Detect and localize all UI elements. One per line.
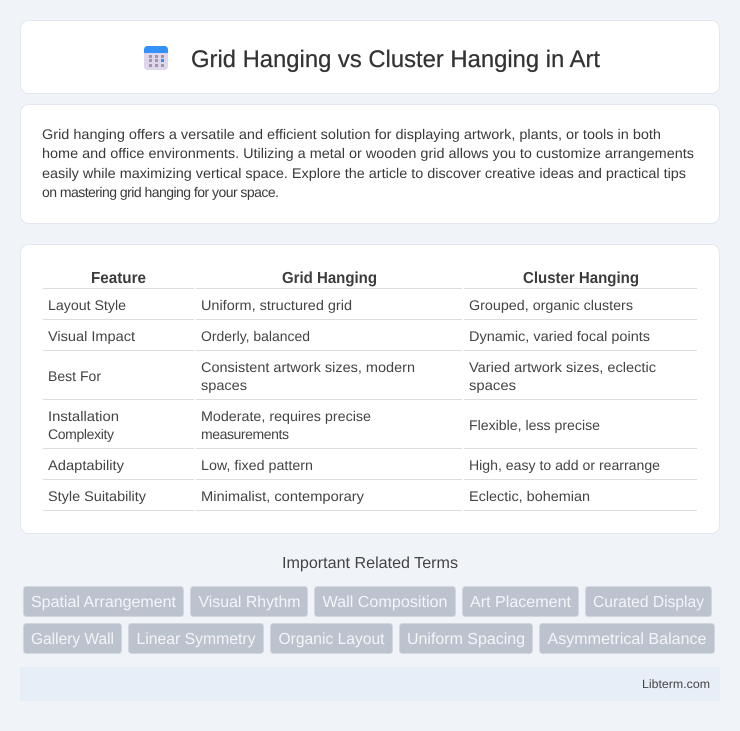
text block: description: home and office environments. Utilizing a metal or wooden grid allows you to customize arrangements bbox=[42, 145, 694, 161]
row: best for: spaces bbox=[201, 377, 247, 393]
row: visual impact: Dynamic, varied focal points bbox=[469, 328, 650, 344]
chip: Asymmetrical Balance bbox=[540, 624, 714, 654]
footer bbox=[20, 667, 720, 701]
title: Grid Hanging vs Cluster Hanging in Art bbox=[191, 46, 600, 73]
chip: Visual Rhythm bbox=[190, 586, 308, 616]
row: layout style bbox=[48, 297, 633, 313]
row: adaptability: High, easy to add or rearrange bbox=[469, 457, 660, 473]
row: visual impact bbox=[48, 328, 650, 344]
row: visual impact: Visual Impact bbox=[48, 328, 135, 344]
chip: Gallery Wall: Gallery Wall bbox=[31, 631, 114, 648]
text block: description: easily while maximizing vertical space. Explore the article to discover creative ideas and practical tips bbox=[42, 165, 686, 181]
panel: title card bbox=[20, 20, 720, 94]
row: best for: Consistent artwork sizes, modern bbox=[201, 359, 415, 375]
table header bbox=[91, 270, 639, 287]
row: best for: Best For bbox=[48, 368, 101, 384]
row: best for bbox=[48, 359, 656, 393]
row: best for: spaces bbox=[469, 377, 516, 393]
panel: comparison table bbox=[20, 244, 720, 534]
footer credit: Libterm.com bbox=[642, 677, 710, 691]
table header: Grid Hanging bbox=[282, 270, 377, 287]
row: layout style: Grouped, organic clusters bbox=[469, 297, 633, 313]
row: installation complexity: Moderate, requires precise bbox=[201, 408, 371, 424]
row: style suitability: Style Suitability bbox=[48, 488, 146, 504]
row: installation complexity: measurements bbox=[201, 426, 289, 442]
chip: Curated Display bbox=[586, 586, 712, 616]
row: installation complexity bbox=[48, 408, 600, 442]
row: visual impact: Orderly, balanced bbox=[201, 328, 310, 344]
chip: Curated Display: Curated Display bbox=[593, 594, 704, 611]
chip: Wall Composition bbox=[314, 586, 456, 616]
chip: Art Placement: Art Placement bbox=[470, 594, 572, 611]
row: installation complexity: Installation bbox=[48, 408, 119, 424]
panel: related term chips bbox=[24, 586, 714, 654]
chip: Art Placement bbox=[462, 586, 578, 616]
chip: Gallery Wall bbox=[24, 624, 122, 654]
chip: Asymmetrical Balance: Asymmetrical Balance bbox=[548, 631, 707, 648]
chip: Visual Rhythm: Visual Rhythm bbox=[198, 594, 300, 611]
text block: description: on mastering grid hanging for your space. bbox=[42, 184, 279, 200]
panel: description bbox=[20, 104, 720, 224]
row: style suitability: Minimalist, contemporary bbox=[201, 488, 364, 504]
text block: description: Grid hanging offers a versatile and efficient solution for displaying artwork, plants, or tools in both bbox=[42, 126, 661, 142]
chip: Wall Composition: Wall Composition bbox=[322, 594, 448, 611]
row: layout style: Layout Style bbox=[48, 297, 126, 313]
text block: description bbox=[42, 126, 694, 200]
row: layout style: Uniform, structured grid bbox=[201, 297, 352, 313]
chip: Linear Symmetry bbox=[128, 624, 264, 654]
row: style suitability bbox=[48, 488, 590, 504]
table header: Cluster Hanging bbox=[523, 270, 639, 287]
chip: Spatial Arrangement bbox=[24, 586, 184, 616]
row: adaptability: Adaptability bbox=[48, 457, 124, 473]
heading: important related terms: Important Related Terms bbox=[282, 555, 458, 572]
row: installation complexity: Complexity bbox=[48, 426, 114, 442]
row: adaptability bbox=[48, 457, 660, 473]
table header: Feature bbox=[91, 270, 146, 287]
chip: Uniform Spacing bbox=[400, 624, 532, 654]
chip: Spatial Arrangement: Spatial Arrangement bbox=[31, 594, 177, 611]
row: best for: Varied artwork sizes, eclectic bbox=[469, 359, 656, 375]
icon: calendar grid bbox=[144, 46, 168, 70]
row: installation complexity: Flexible, less precise bbox=[469, 417, 600, 433]
chip: Uniform Spacing: Uniform Spacing bbox=[407, 631, 525, 648]
chip: Linear Symmetry: Linear Symmetry bbox=[136, 631, 256, 648]
row: adaptability: Low, fixed pattern bbox=[201, 457, 313, 473]
chip: Organic Layout bbox=[270, 624, 392, 654]
row: style suitability: Eclectic, bohemian bbox=[469, 488, 590, 504]
chip: Organic Layout: Organic Layout bbox=[278, 631, 385, 648]
